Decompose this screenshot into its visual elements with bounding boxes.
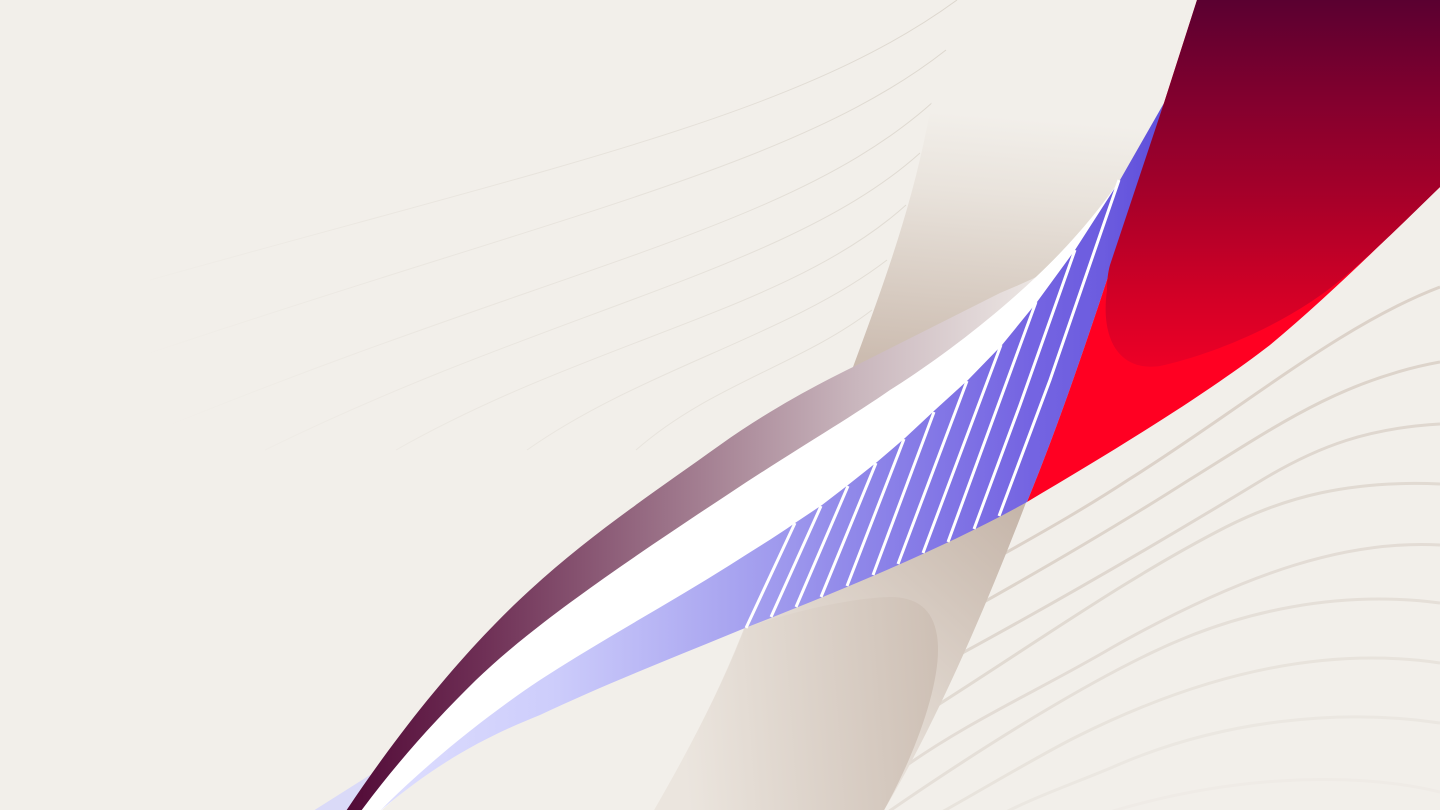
dark crimson gradient overlay: [1106, 0, 1440, 367]
contour lines lower right: [888, 287, 1440, 810]
white ribbon: [361, 180, 1130, 810]
beige shape upper: [853, 90, 1163, 400]
maroon ribbon: [346, 277, 1036, 810]
white hatch lines: [746, 180, 1119, 628]
beige shape lower: [653, 500, 1027, 810]
beige rounded blob: [653, 597, 938, 810]
lavender sliver: [313, 775, 400, 810]
blue ribbon: [380, 103, 1164, 810]
thin contour lines upper left: [150, 0, 957, 450]
red shape: [1027, 0, 1440, 502]
